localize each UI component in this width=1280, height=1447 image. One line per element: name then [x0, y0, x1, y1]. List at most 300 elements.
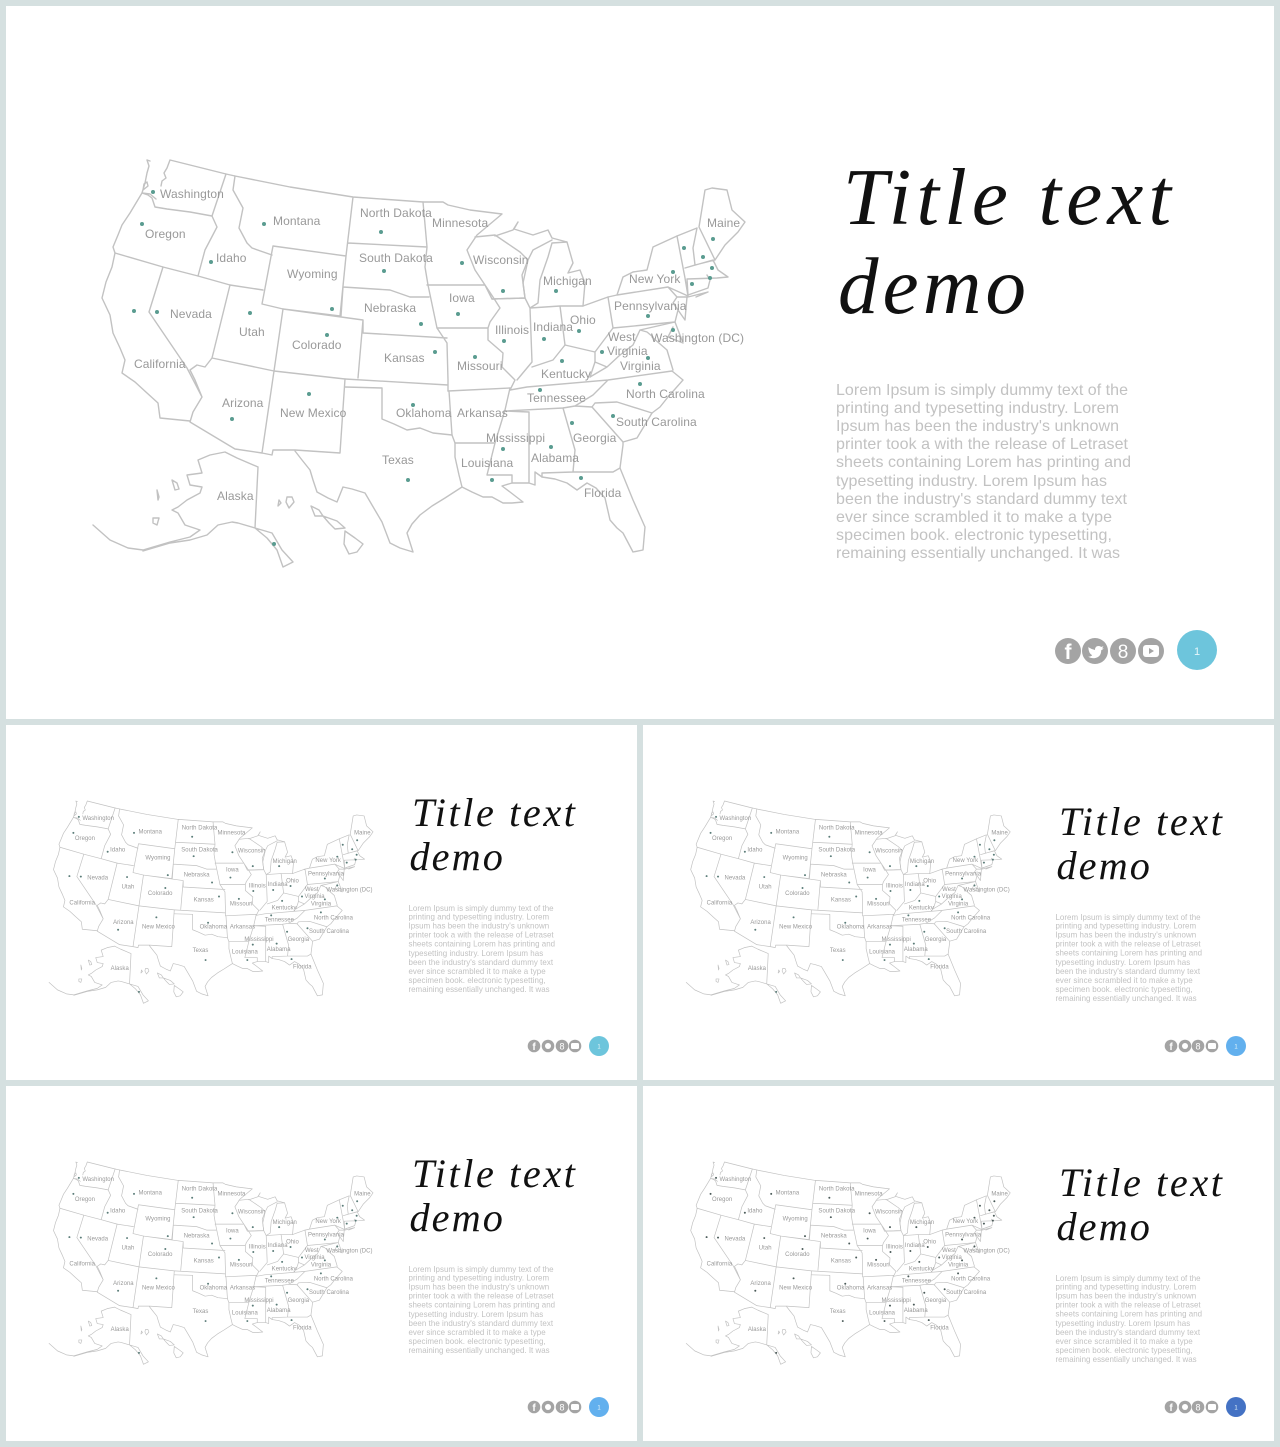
body text: Ipsum has been the industry's unknown	[836, 418, 1119, 435]
title: Title text	[1059, 1160, 1223, 1205]
map: United States outline with states: Utah	[759, 1245, 772, 1251]
map: United States outline with states: New York	[953, 858, 978, 864]
map: United States outline with states: Missouri	[457, 359, 502, 373]
map: United States outline with states: Wyoming	[783, 856, 808, 862]
map: United States outline with states: South Dakota	[181, 1209, 219, 1215]
body text: ever since scrambled it to make a type	[408, 967, 546, 976]
map: United States outline with states: South Dakota	[181, 848, 219, 854]
body text: remaining essentially unchanged. It was	[836, 545, 1120, 562]
map: United States outline with states: Illinois	[495, 323, 529, 337]
map: United States outline with states: New Mexico	[142, 925, 176, 931]
map: United States outline with states: Tennessee	[527, 391, 586, 405]
map: United States outline with states: Nebraska	[364, 301, 416, 315]
map: United States outline with states: California	[69, 1261, 96, 1267]
map: United States outline with states: Utah	[122, 1245, 134, 1251]
map: United States outline with states: Washington (DC)	[651, 331, 744, 345]
map: United States outline with states: Arizona	[113, 920, 134, 926]
map: United States outline with states: Texas	[830, 1309, 846, 1315]
map: United States outline with states: South Carolina	[616, 415, 697, 429]
map: United States outline with states: Arkansas	[867, 1286, 892, 1292]
map: United States outline with states: Texas	[193, 1309, 208, 1315]
map: United States outline with states: Missouri	[230, 901, 252, 907]
body text: ever since scrambled it to make a type	[1055, 976, 1193, 985]
map: United States outline with states: Kansas	[194, 897, 214, 903]
map: United States outline with states: Minnesota	[218, 1191, 246, 1197]
map: United States outline with states: Indiana	[268, 1243, 288, 1249]
map: United States outline with states: Arizona	[750, 920, 772, 926]
icons: social buttons	[528, 1401, 581, 1414]
map: United States outline with states: Alabama	[267, 1308, 291, 1314]
map: United States outline with states: West	[942, 887, 956, 893]
map: United States outline with states: Texas	[830, 948, 846, 954]
page number badge	[1226, 1036, 1246, 1056]
body text: Lorem Ipsum is simply dummy text of the	[1055, 1274, 1201, 1283]
map: United States outline with states: Kentucky	[541, 367, 591, 381]
map: United States outline with states: North Carolina	[951, 915, 991, 921]
map: United States outline with states: California	[69, 900, 96, 906]
map: United States outline with states: Wyoming	[287, 267, 338, 281]
title	[1056, 799, 1223, 888]
map: United States outline with states: Washington	[82, 1177, 114, 1183]
map: United States outline with states: Montana	[138, 1190, 163, 1196]
map: United States outline with states: Maine	[354, 830, 371, 836]
map: United States outline with states: Washington	[160, 187, 224, 201]
map: United States outline with states: New York	[315, 858, 341, 864]
map: United States outline with states: Idaho	[747, 1209, 763, 1215]
map: United States outline with states: Wisconsin	[875, 849, 903, 855]
icons: social buttons: 8	[559, 1402, 565, 1412]
map: United States outline with states: Ohio	[923, 879, 937, 885]
map: United States outline with states: California	[707, 1261, 733, 1267]
map: United States outline with states: Missouri	[867, 901, 890, 907]
panel: slide variant top left	[6, 725, 637, 1080]
map: United States outline with states: New York	[629, 272, 681, 286]
map: United States outline with states: Virginia	[311, 901, 332, 907]
body text: printing and typesetting industry. Lorem	[408, 1274, 550, 1283]
map: United States outline with states: Texas	[193, 948, 208, 954]
icons: social buttons: 8	[1195, 1042, 1201, 1052]
body text: Lorem Ipsum is simply dummy text of the	[836, 382, 1128, 399]
map: United States outline with states: Nevada	[170, 307, 212, 321]
map: United States outline with states: Oregon	[75, 836, 95, 842]
map: United States outline with states: Colorado	[148, 1252, 173, 1258]
page number badge	[1226, 1397, 1246, 1417]
body text: Lorem Ipsum is simply dummy text of the	[408, 1265, 554, 1274]
title: demo	[1056, 843, 1150, 888]
map: United States outline with states: Illinois	[886, 883, 903, 889]
map: United States outline with states: Idaho	[110, 1209, 126, 1215]
map: United States outline with states: Wyoming	[145, 856, 171, 862]
map: United States outline with states	[686, 1162, 1010, 1364]
map: United States outline with states: Pennsylvania	[614, 299, 687, 313]
body text: been the industry's standard dummy text	[1055, 1328, 1201, 1337]
map: United States outline with states: Kansas	[831, 897, 851, 903]
map: United States outline with states: Kansas	[831, 1258, 851, 1264]
map: United States outline with states: Nevada	[87, 876, 109, 882]
map: United States outline with states: Georgia	[573, 431, 617, 445]
map: United States outline with states: Utah	[239, 325, 265, 339]
body text: remaining essentially unchanged. It was	[1055, 994, 1197, 1003]
title: demo	[409, 834, 503, 879]
map: United States outline with states: Indiana	[268, 882, 288, 888]
map: United States outline with states: South Dakota	[818, 848, 856, 854]
map: United States outline with states: Ohio	[286, 1240, 300, 1246]
body text: printing and typesetting industry. Lorem	[836, 400, 1119, 417]
map: United States outline with states: Wisconsin	[875, 1210, 903, 1216]
map: United States outline with states: Georgia	[288, 1298, 310, 1304]
body text: printing and typesetting industry. Lorem	[1055, 1283, 1197, 1292]
body text: sheets containing Lorem has printing and	[408, 1301, 555, 1310]
body text: specimen book. electronic typesetting,	[836, 527, 1112, 544]
map: United States outline with states: Georgia	[288, 937, 310, 943]
map: United States outline with states: North Dakota	[360, 206, 432, 220]
title	[409, 1151, 576, 1240]
map: United States outline with states: Washington (DC)	[964, 887, 1010, 893]
map: United States outline with states: Iowa	[449, 291, 475, 305]
map: United States outline with states: South Carolina	[946, 1290, 987, 1296]
map: United States outline with states: Oklahoma	[200, 925, 228, 931]
map: United States outline with states: Arizona	[222, 396, 264, 410]
map: United States outline with states: Mississippi	[882, 1298, 911, 1304]
map: United States outline with states: Colorado	[292, 338, 342, 352]
body text: remaining essentially unchanged. It was	[1055, 1355, 1197, 1364]
body text: specimen book. electronic typesetting,	[408, 976, 546, 985]
map: United States outline with states: West	[608, 330, 636, 344]
map: United States outline with states: Virginia	[620, 359, 661, 373]
icons: social buttons: 8	[1195, 1402, 1201, 1412]
page number badge: 1	[1234, 1406, 1238, 1412]
body text	[408, 904, 555, 994]
map: United States outline with states: Minnesota	[855, 830, 883, 836]
map: United States outline with states: Florida	[930, 965, 949, 971]
map: United States outline with states: Oregon	[712, 1197, 732, 1203]
map: United States outline with states: Mississippi	[882, 937, 911, 943]
map: United States outline with states: Michigan	[910, 1220, 934, 1226]
body text: been the industry's standard dummy text	[408, 958, 554, 967]
map: United States outline with states: New Mexico	[779, 1286, 813, 1292]
map: United States outline with states: South Dakota	[818, 1209, 856, 1215]
panel: main slide	[6, 6, 1274, 719]
icons: social buttons: f	[1169, 1042, 1173, 1053]
body text: ever since scrambled it to make a type	[1055, 1337, 1193, 1346]
map: United States outline with states: Illinois	[249, 1244, 266, 1250]
icons: social buttons: f	[1169, 1403, 1173, 1414]
map: United States outline with states: Pennsylvania	[945, 1233, 982, 1239]
map: United States outline with states: Alaska	[217, 489, 254, 503]
title: Title text	[1059, 799, 1223, 844]
page number badge	[589, 1397, 609, 1417]
map: United States outline with states: Oklahoma	[837, 1286, 865, 1292]
body text: printer took a with the release of Letraset	[1055, 940, 1201, 949]
body text: typesetting industry. Lorem Ipsum has	[836, 473, 1107, 490]
map: United States outline with states: Colorado	[148, 891, 173, 897]
map: United States outline with states: New Mexico	[779, 925, 813, 931]
map: United States outline with states: Virginia	[942, 894, 962, 900]
map: United States outline with states: California	[134, 357, 186, 371]
map: United States outline with states: Minnesota	[855, 1191, 883, 1197]
map: United States outline with states: Florida	[293, 965, 312, 971]
page number badge	[1177, 630, 1217, 670]
map: United States outline with states: Louisiana	[461, 456, 514, 470]
map: United States outline with states: Arkansas	[867, 925, 892, 931]
map: United States outline with states: South Carolina	[309, 929, 350, 935]
map: United States outline with states: Idaho	[747, 848, 763, 854]
body text: printer took a with the release of Letraset	[408, 1292, 554, 1301]
map: United States outline with states: Oklahoma	[396, 406, 452, 420]
map: United States outline with states: Kentucky	[272, 905, 297, 911]
body text: typesetting industry. Lorem Ipsum has	[1055, 958, 1190, 967]
map: United States outline with states: West	[305, 887, 319, 893]
map: United States outline with states: Washington	[82, 816, 114, 822]
map: United States outline with states: Ohio	[923, 1240, 937, 1246]
map: United States outline with states: Mississippi	[244, 937, 274, 943]
map: United States outline with states: Georgia	[925, 937, 947, 943]
map: United States outline with states: Arkansas	[230, 925, 255, 931]
map: United States outline with states: Wisconsin	[238, 849, 265, 855]
map: United States outline with states: South Carolina	[309, 1290, 350, 1296]
body text: printer took a with the release of Letraset	[1055, 1301, 1201, 1310]
map: United States outline with states: Maine	[991, 1191, 1008, 1197]
map: United States outline with states: Ohio	[570, 313, 596, 327]
map: United States outline with states: Idaho	[216, 251, 247, 265]
body text: typesetting industry. Lorem Ipsum has	[1055, 1319, 1190, 1328]
map: United States outline with states: Oklahoma	[837, 925, 865, 931]
map: United States outline with states: Illinois	[886, 1244, 903, 1250]
map: United States outline with states: Washington	[720, 816, 751, 822]
map: United States outline with states	[93, 160, 745, 567]
map: United States outline with states: Pennsylvania	[308, 872, 345, 878]
map: United States outline with states: Colorado	[785, 1252, 810, 1258]
map: United States outline with states: Texas	[382, 453, 414, 467]
map: United States outline with states: North Dakota	[182, 1186, 218, 1192]
body text: printing and typesetting industry. Lorem	[408, 913, 550, 922]
map: United States outline with states: Oregon	[145, 227, 186, 241]
body text: remaining essentially unchanged. It was	[408, 1346, 550, 1355]
map: United States outline with states: Missouri	[867, 1262, 890, 1268]
body text: typesetting industry. Lorem Ipsum has	[408, 1310, 543, 1319]
map: United States outline with states: Florida	[584, 486, 622, 500]
page number badge: 1	[597, 1044, 601, 1050]
body text: Ipsum has been the industry's unknown	[408, 1283, 549, 1292]
map: United States outline with states: Wisconsin	[473, 253, 529, 267]
map: United States outline with states: Arizona	[113, 1281, 134, 1287]
map: United States outline with states: Louisiana	[232, 1311, 258, 1317]
map: United States outline with states: Virginia	[304, 894, 325, 900]
map: United States outline with states: Georgia	[925, 1298, 947, 1304]
map: United States outline with states: Arkansas	[230, 1286, 255, 1292]
map: United States outline with states: Illinois	[249, 883, 266, 889]
map: United States outline with states: Michigan	[910, 859, 934, 865]
map: United States outline with states: Alabama	[904, 947, 928, 953]
map: United States outline with states: Michigan	[543, 274, 592, 288]
map: United States outline with states: New York	[315, 1219, 341, 1225]
map: United States outline with states: Kentucky	[909, 905, 934, 911]
body text: specimen book. electronic typesetting,	[408, 1337, 546, 1346]
map: United States outline with states: Minnesota	[218, 830, 246, 836]
icons: social buttons: f	[1064, 641, 1072, 664]
map: United States outline with states: Maine	[707, 216, 740, 230]
icons: social buttons	[1165, 1040, 1218, 1053]
icons: social buttons: f	[532, 1042, 536, 1053]
icons: social buttons: f	[532, 1403, 536, 1414]
map: United States outline with states: North Dakota	[819, 825, 855, 831]
map: United States outline with states: Pennsylvania	[308, 1233, 345, 1239]
panel: slide variant bottom right	[643, 1086, 1274, 1441]
panel: slide variant bottom left	[6, 1086, 637, 1441]
title: demo	[409, 1195, 503, 1240]
map: United States outline with states: Montana	[776, 829, 800, 835]
map: United States outline with states: New Mexico	[280, 406, 347, 420]
body text: Ipsum has been the industry's unknown	[1055, 931, 1196, 940]
icons: social buttons: 8	[1118, 642, 1128, 663]
body text: sheets containing Lorem has printing and	[408, 940, 555, 949]
icons: social buttons: 8	[559, 1042, 565, 1052]
map: United States outline with states: Washington (DC)	[326, 1248, 373, 1254]
map: United States outline with states: Maine	[354, 1191, 371, 1197]
map: United States outline with states: West	[305, 1248, 319, 1254]
map: United States outline with states: Michigan	[273, 859, 297, 865]
body text	[1055, 1274, 1202, 1364]
map: United States outline with states: Iowa	[863, 868, 877, 874]
map: United States outline with states: Tennessee	[902, 917, 932, 923]
body text	[1055, 913, 1202, 1003]
map: United States outline with states: Florida	[293, 1326, 312, 1332]
map: United States outline with states: Nebraska	[821, 1234, 847, 1240]
map: United States outline with states: Nevada	[724, 876, 746, 882]
map: United States outline with states	[49, 1162, 373, 1364]
map: United States outline with states: Nebraska	[184, 1234, 210, 1240]
map: United States outline with states: Washington (DC)	[964, 1248, 1010, 1254]
map: United States outline with states: Michigan	[273, 1220, 297, 1226]
map: United States outline with states: Ohio	[286, 879, 300, 885]
body text: Lorem Ipsum is simply dummy text of the	[408, 904, 554, 913]
body text: printer took a with the release of Letraset	[408, 931, 554, 940]
body text: been the industry's standard dummy text	[836, 491, 1128, 508]
map: United States outline with states	[686, 801, 1010, 1003]
map: United States outline with states: New York	[953, 1219, 978, 1225]
map: United States outline with states: New Mexico	[142, 1286, 176, 1292]
map: United States outline with states: Iowa	[226, 1229, 239, 1235]
body text	[836, 382, 1131, 562]
map: United States outline with states: Alaska	[748, 966, 767, 972]
map: United States outline with states: Nevada	[87, 1237, 109, 1243]
map: United States outline with states: Utah	[759, 884, 772, 890]
map: United States outline with states: Washington	[720, 1177, 751, 1183]
icons: social buttons	[528, 1040, 581, 1053]
map: United States outline with states: Louisiana	[869, 1311, 896, 1317]
title: Title text	[843, 152, 1173, 242]
map: United States outline with states: North Dakota	[182, 825, 218, 831]
map: United States outline with states: Virginia	[942, 1255, 962, 1261]
map: United States outline with states: North Carolina	[626, 387, 705, 401]
map: United States outline with states: Louisiana	[232, 950, 258, 956]
title	[838, 152, 1173, 331]
page number badge	[589, 1036, 609, 1056]
map: United States outline with states: Mississippi	[486, 431, 545, 445]
body text: ever since scrambled it to make a type	[408, 1328, 546, 1337]
map: United States outline with states: Montana	[273, 214, 321, 228]
map: United States outline with states: Tennessee	[265, 1278, 295, 1284]
map: United States outline with states: Wyoming	[145, 1217, 171, 1223]
map: United States outline with states: North Carolina	[314, 1276, 354, 1282]
body text: sheets containing Lorem has printing and	[1055, 949, 1202, 958]
body text: remaining essentially unchanged. It was	[408, 985, 550, 994]
panel: slide variant top right	[643, 725, 1274, 1080]
map: United States outline with states: Kansas	[384, 351, 425, 365]
body text: Lorem Ipsum is simply dummy text of the	[1055, 913, 1201, 922]
map: United States outline with states: Alaska	[748, 1327, 767, 1333]
map: United States outline with states: Alabama	[267, 947, 291, 953]
map: United States outline with states: Virginia	[948, 1262, 969, 1268]
map: United States outline with states: Oklahoma	[200, 1286, 228, 1292]
map: United States outline with states: Indiana	[905, 882, 925, 888]
map: United States outline with states: Montana	[776, 1190, 800, 1196]
map: United States outline with states: Oregon	[712, 836, 732, 842]
title: Title text	[412, 790, 576, 835]
map: United States outline with states: Alaska	[111, 1327, 129, 1333]
map: United States outline with states: Wyoming	[783, 1217, 808, 1223]
map: United States outline with states: Tennessee	[265, 917, 295, 923]
map: United States outline with states: West	[942, 1248, 956, 1254]
map: United States outline with states: Alabama	[904, 1308, 928, 1314]
body text: sheets containing Lorem has printing and	[836, 454, 1131, 471]
map: United States outline with states: Arizona	[750, 1281, 772, 1287]
icons: social buttons	[1165, 1401, 1218, 1414]
map: United States outline with states: Indiana	[533, 320, 573, 334]
map: United States outline with states: Virginia	[607, 344, 648, 358]
map: United States outline with states: Maine	[991, 830, 1008, 836]
map: United States outline with states: Wisconsin	[238, 1210, 265, 1216]
map: United States outline with states: North Carolina	[951, 1276, 991, 1282]
map: United States outline with states: Utah	[122, 884, 134, 890]
map: United States outline with states: Oregon	[75, 1197, 95, 1203]
map: United States outline with states: Louisiana	[869, 950, 896, 956]
map: United States outline with states: California	[707, 900, 733, 906]
title: demo	[838, 241, 1026, 331]
map: United States outline with states: Virginia	[948, 901, 969, 907]
title: demo	[1056, 1204, 1150, 1249]
map: United States outline with states: Washington (DC)	[326, 887, 373, 893]
title	[409, 790, 576, 879]
map: United States outline with states: Colorado	[785, 891, 810, 897]
map: United States outline with states: North Dakota	[819, 1186, 855, 1192]
map: United States outline with states: Minnesota	[432, 216, 488, 230]
body text: Ipsum has been the industry's unknown	[408, 922, 549, 931]
map: United States outline with states: Alaska	[111, 966, 129, 972]
map: United States outline with states: Nebraska	[821, 873, 847, 879]
map: United States outline with states: Mississippi	[244, 1298, 274, 1304]
body text: ever since scrambled it to make a type	[836, 509, 1112, 526]
map: United States outline with states: Tennessee	[902, 1278, 932, 1284]
page number badge: 1	[1234, 1044, 1238, 1050]
icons: social buttons	[1055, 638, 1164, 664]
map: United States outline with states: Alabama	[531, 451, 579, 465]
page number badge: 1	[1194, 646, 1200, 658]
map: United States outline with states: Pennsylvania	[945, 872, 982, 878]
body text: typesetting industry. Lorem Ipsum has	[408, 949, 543, 958]
body text: sheets containing Lorem has printing and	[1055, 1310, 1202, 1319]
map: United States outline with states: Indiana	[905, 1243, 925, 1249]
map: United States outline with states	[49, 801, 373, 1003]
page number badge: 1	[597, 1406, 601, 1412]
map: United States outline with states: North Carolina	[314, 915, 354, 921]
map: United States outline with states: Missouri	[230, 1262, 252, 1268]
map: United States outline with states: Kentucky	[272, 1266, 297, 1272]
map: United States outline with states: Iowa	[863, 1229, 877, 1235]
map: United States outline with states: Iowa	[226, 868, 239, 874]
body text: Ipsum has been the industry's unknown	[1055, 1292, 1196, 1301]
map: United States outline with states: Idaho	[110, 848, 126, 854]
